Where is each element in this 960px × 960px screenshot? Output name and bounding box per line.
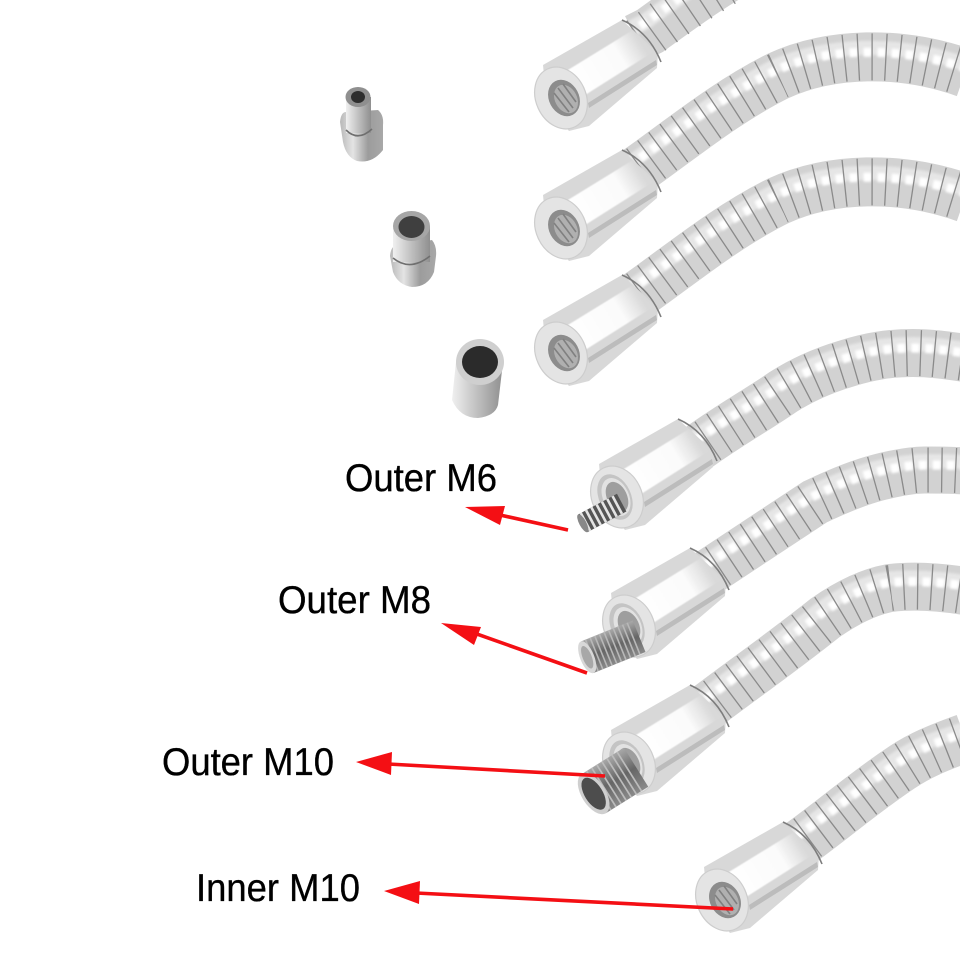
label: Inner M10: Inner M10: [196, 867, 360, 910]
loose adapter 2: [390, 211, 436, 287]
gooseneck hose 3 (inner thread): [525, 173, 960, 393]
M10 threaded stud: [571, 748, 648, 820]
loose adapter 3: [452, 339, 504, 418]
gooseneck hose 1 (top, inner thread): [525, 0, 760, 138]
arrow: Outer M10: [356, 752, 605, 776]
gooseneck hose 2 (inner thread): [525, 48, 960, 268]
gooseneck hose 4 with outer M6 stud: [575, 344, 960, 537]
M8 threaded stud: [574, 620, 645, 676]
label: Outer M6: Outer M6: [345, 457, 497, 500]
label: Outer M10: Outer M10: [162, 741, 334, 784]
gooseneck hose 5 with outer M8 stud: [574, 461, 960, 676]
arrow: Outer M8: [441, 623, 587, 673]
arrow: Outer M6: [465, 506, 568, 530]
M6 threaded stud: [575, 494, 626, 534]
loose adapter 1: [340, 87, 383, 162]
label: Outer M8: Outer M8: [278, 579, 431, 622]
gooseneck hose 7 with inner M10 thread: [686, 729, 960, 940]
gooseneck hose 6 with outer M10 stud: [571, 578, 960, 820]
arrow: Inner M10: [384, 881, 733, 909]
